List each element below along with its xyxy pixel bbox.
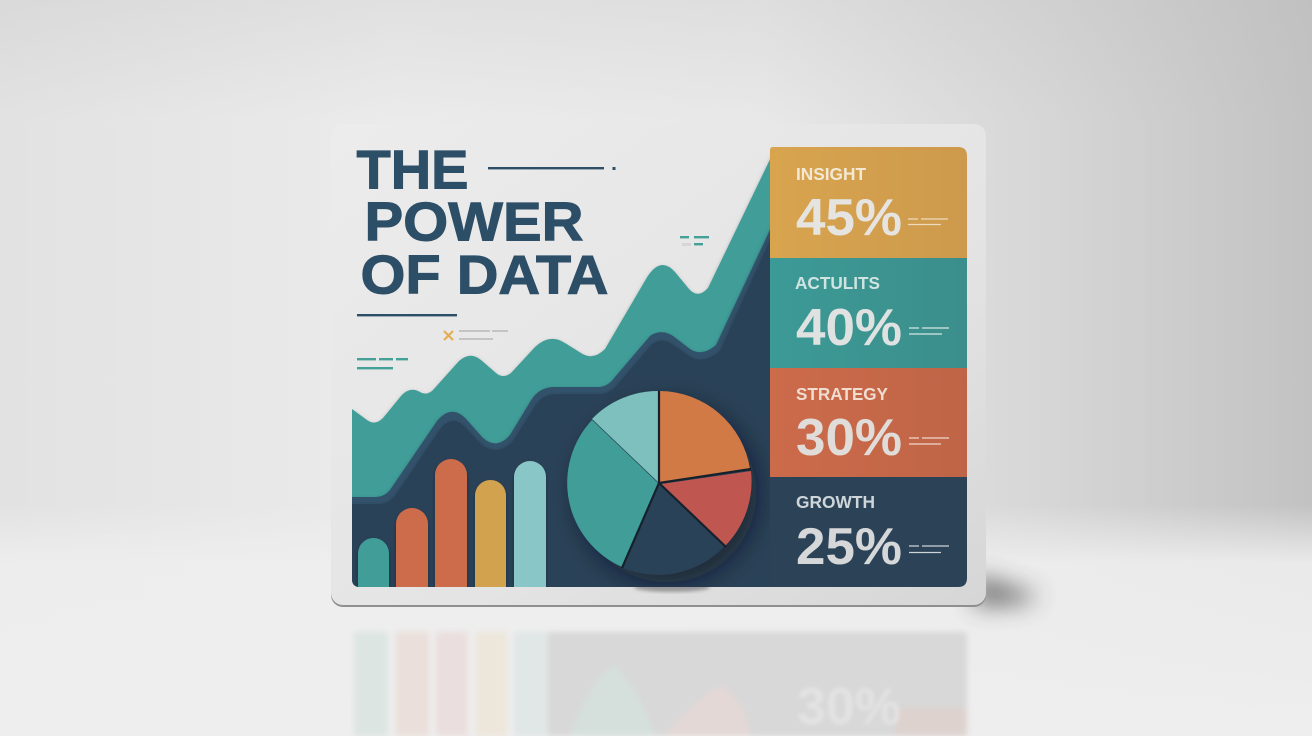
teal dashes left (357, 358, 408, 369)
title rule and dot (488, 167, 616, 170)
panel: strategy: STRATEGY (796, 384, 888, 404)
teal area wave (352, 149, 775, 587)
bar chart (358, 459, 546, 587)
title (356, 138, 608, 306)
reflection (354, 632, 967, 736)
panel: insight: INSIGHT (796, 164, 866, 184)
panel: insight: 45% (796, 189, 902, 247)
panel: strategy: 30% (796, 409, 902, 467)
title: THE (356, 138, 468, 200)
side panel (770, 147, 967, 587)
card (331, 124, 986, 607)
reflection: 30% (797, 678, 901, 736)
pie shadow on card edge (634, 582, 710, 592)
pie chart (567, 391, 752, 575)
panel: actulits (770, 258, 967, 368)
icon: orange cross with grey lines (444, 330, 508, 340)
teal dashes right (680, 236, 709, 246)
panel: strategy (770, 368, 967, 477)
panel: growth: GROWTH (796, 492, 875, 512)
title underline (357, 314, 457, 316)
panel: actulits: ACTULITS (795, 273, 880, 293)
navy ridge band (352, 219, 775, 587)
panel: growth (770, 477, 967, 587)
panel: actulits: 40% (796, 299, 902, 357)
card shadow (975, 575, 1040, 606)
title: OF DATA (360, 244, 608, 306)
navy ground (352, 229, 775, 587)
panel: insight (770, 147, 967, 258)
panel: growth: 25% (796, 518, 902, 576)
chart area (352, 149, 775, 587)
title: POWER (364, 190, 584, 252)
